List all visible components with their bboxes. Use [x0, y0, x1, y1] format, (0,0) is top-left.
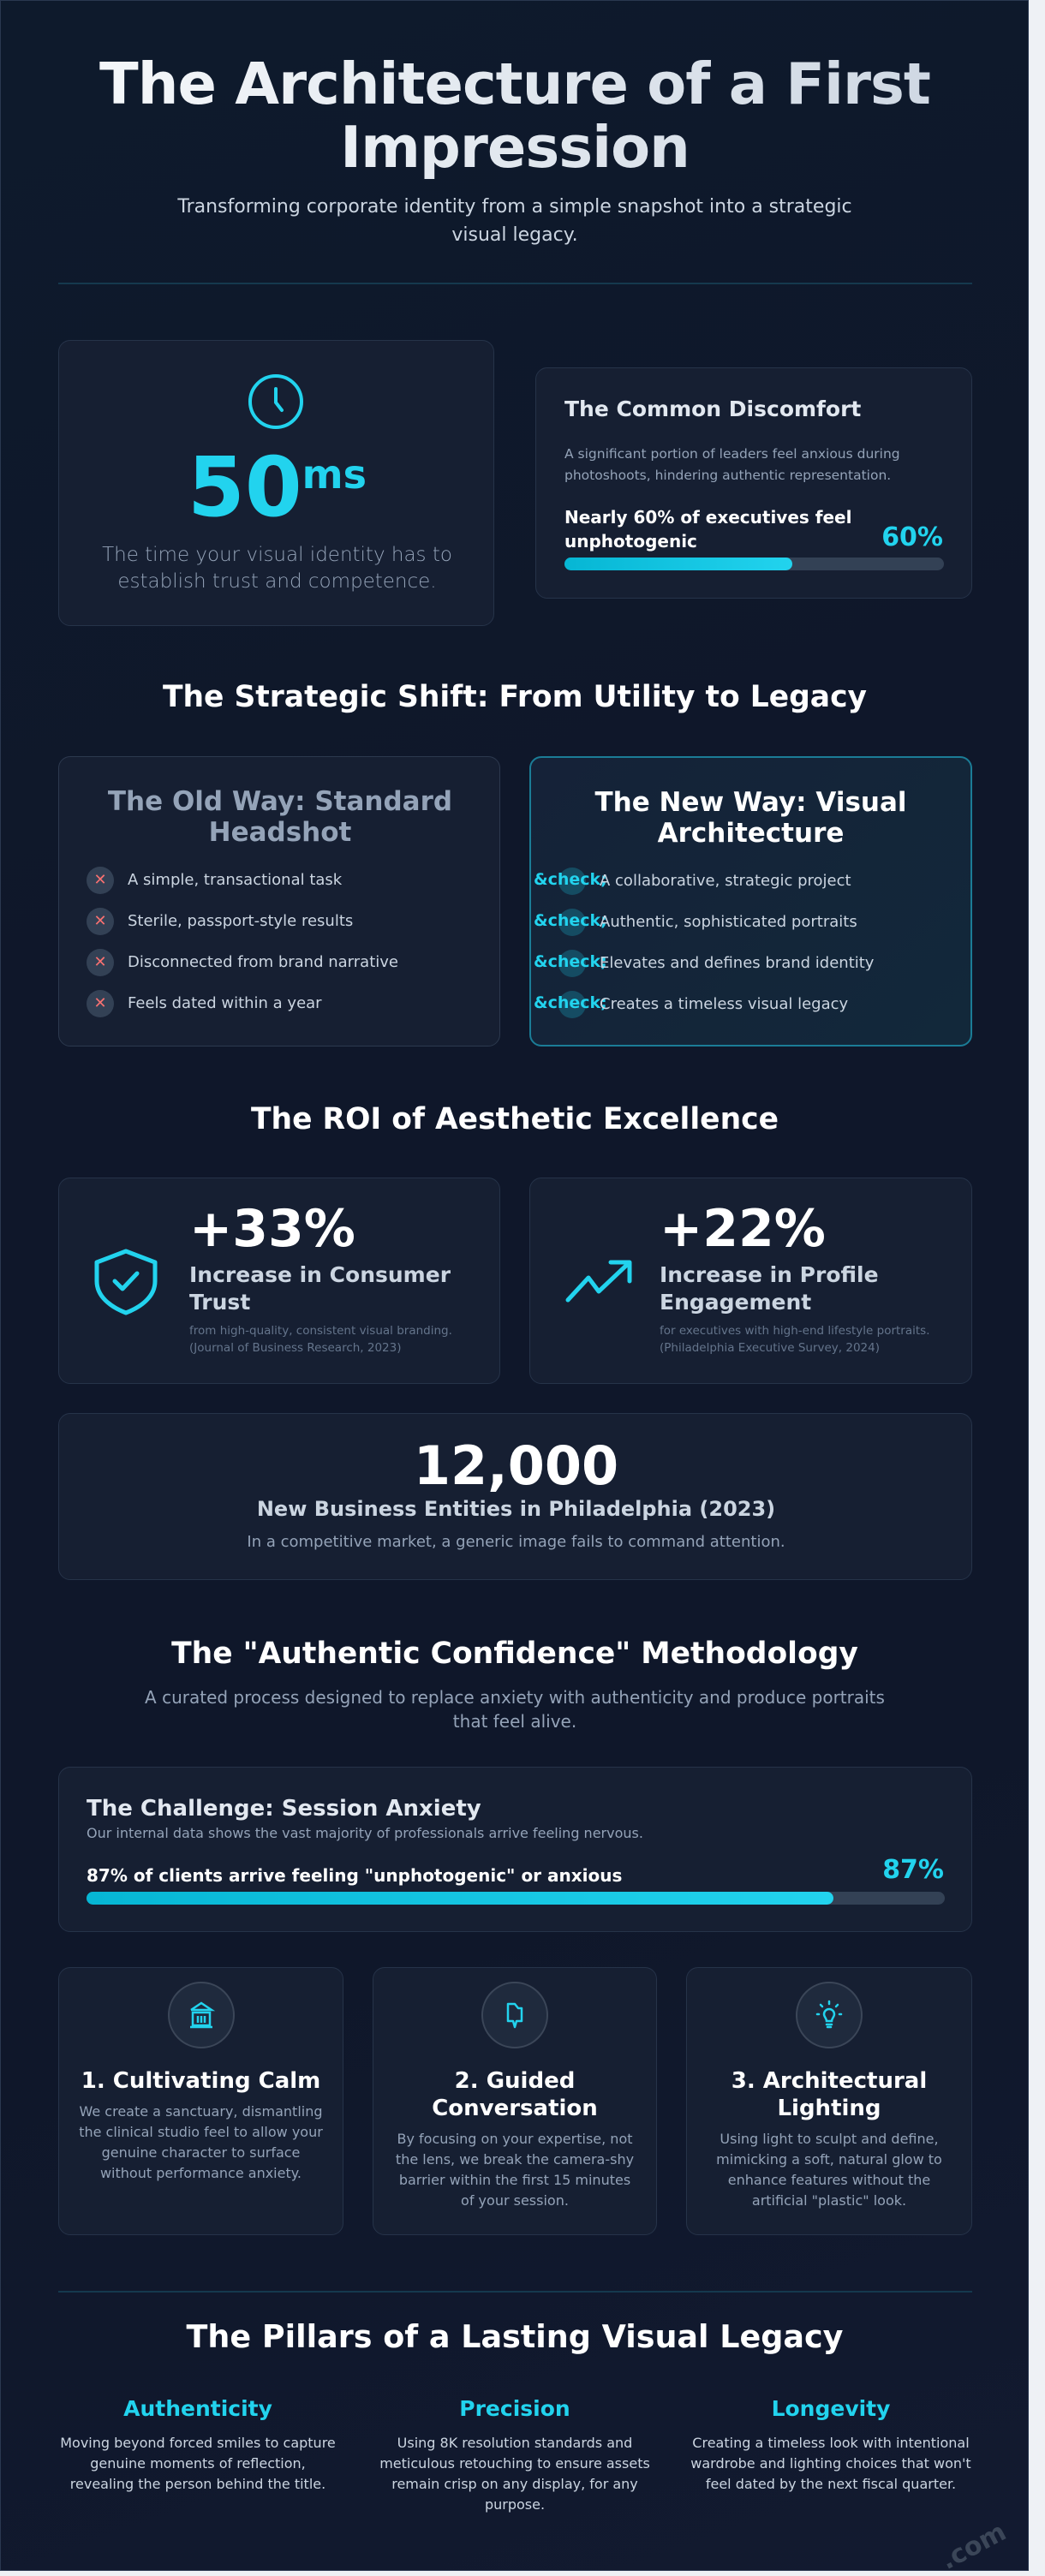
panel: step 3 — [686, 1967, 972, 2235]
panel: +22% — [529, 1178, 972, 1384]
bar: 60% — [564, 558, 944, 570]
panel: 12,000: New Business Entities in Philadelphia (2023) — [257, 1497, 775, 1521]
heading: ROI: The ROI of Aesthetic Excellence — [251, 1102, 779, 1136]
panel: old way: The Old Way: Standard — [108, 786, 452, 817]
panel: step 2 — [373, 1967, 657, 2235]
panel: new way — [529, 756, 972, 1046]
panel: old way: Sterile, passport-style results — [128, 912, 353, 930]
stat caption: The time your visual identity has to establish trust and competence. — [102, 544, 452, 593]
title — [1, 52, 1029, 179]
panel: +22%: Increase in Profile Engagement — [660, 1262, 879, 1315]
panel: 12,000: 12,000 — [414, 1434, 618, 1497]
panel: session anxiety: 87% of clients arrive feeling "unphotogenic" or anxious — [87, 1865, 622, 1886]
panel: new way: &check; — [534, 993, 607, 1012]
panel: new way: Creates a timeless visual legacy — [600, 995, 848, 1013]
pillar: authenticity: Authenticity — [123, 2396, 272, 2421]
heading: methodology: The "Authentic Confidence" Methodology — [171, 1637, 858, 1671]
panel: 50ms stat — [58, 340, 494, 626]
title: The Architecture of a First — [99, 51, 930, 117]
panel: common discomfort: The Common Discomfort — [564, 397, 861, 421]
pillar: precision — [379, 2396, 650, 2513]
icon: trend arrow — [565, 1261, 632, 1302]
panel: session anxiety: Our internal data shows the vast majority of professionals arrive feeling nervous. — [87, 1825, 643, 1841]
panel: new way: Architecture — [658, 818, 844, 849]
panel: session anxiety: The Challenge: Session Anxiety — [87, 1796, 481, 1822]
panel: step 2: Conversation — [432, 2096, 598, 2121]
panel: new way: Authentic, sophisticated portraits — [600, 913, 857, 931]
panel: old way — [58, 756, 500, 1046]
icon: clock — [248, 374, 303, 429]
panel: old way: ✕ — [93, 871, 107, 889]
pillar: longevity: Longevity — [772, 2396, 890, 2421]
panel: common discomfort — [535, 367, 972, 599]
methodology subtitle: A curated process designed to replace anxiety with authenticity and produce portraits that feel alive. — [145, 1687, 885, 1732]
panel: step 2: By focusing on your expertise, not the lens, we break the camera-shy barrier within the first 15 minutes of your session. — [396, 2131, 634, 2209]
heading: pillars: The Pillars of a Lasting Visual Legacy — [187, 2318, 843, 2355]
panel: +33%: Increase in Consumer Trust — [189, 1262, 451, 1315]
panel: +22%: for executives with high-end lifestyle portraits. (Philadelphia Executive Survey, 2024) — [660, 1324, 930, 1355]
panel: old way: ✕ — [93, 953, 107, 971]
panel: new way: Elevates and defines brand identity — [600, 954, 874, 972]
panel: 12,000 — [58, 1413, 972, 1580]
heading: strategic shift: The Strategic Shift: From Utility to Legacy — [163, 680, 867, 714]
panel: +33%: from high-quality, consistent visual branding. (Journal of Business Research, 2023) — [189, 1324, 452, 1355]
panel: step 3: Lighting — [777, 2096, 881, 2121]
panel: new way: A collaborative, strategic project — [600, 872, 851, 890]
panel: old way: Disconnected from brand narrative — [128, 953, 398, 971]
panel: new way: &check; — [534, 870, 607, 889]
panel: step 1 — [58, 1967, 343, 2235]
icon: speech bubble — [481, 1982, 548, 2048]
panel: step 2: 2. Guided — [455, 2068, 575, 2094]
panel: step 3: Using light to sculpt and define, mimicking a soft, natural glow to enhance features without the artificial "plastic" look. — [716, 2131, 942, 2209]
panel: +22%: +22% — [660, 1199, 826, 1259]
panel: step 3: 3. Architectural — [732, 2068, 927, 2094]
pillar: authenticity: Moving beyond forced smiles to capture genuine moments of reflection, revealing the person behind the title. — [60, 2435, 336, 2492]
subtitle: Transforming corporate identity from a simple snapshot into a strategic visual legacy. — [177, 196, 852, 246]
pillar: precision: Precision — [459, 2396, 570, 2421]
pillar: longevity: Creating a timeless look with intentional wardrobe and lighting choices that won't feel dated by the next fiscal quarter. — [690, 2435, 971, 2492]
panel: old way: Headshot — [209, 817, 351, 848]
panel: new way: The New Way: Visual — [594, 787, 907, 818]
icon: building — [168, 1982, 235, 2048]
panel: common discomfort: A significant portion of leaders feel anxious during photoshoots, hindering authentic representation. — [564, 446, 900, 483]
panel: old way: ✕ — [93, 994, 107, 1012]
panel: 12,000: In a competitive market, a generic image fails to command attention. — [247, 1533, 785, 1551]
panel: old way: Feels dated within a year — [128, 994, 322, 1012]
panel: common discomfort: 60% — [881, 522, 943, 552]
panel: new way: &check; — [534, 952, 607, 971]
bar: 87% — [87, 1892, 945, 1905]
panel: session anxiety — [58, 1767, 972, 1932]
watermark: .com — [936, 2517, 1012, 2576]
title: Impression — [340, 114, 690, 181]
panel: common discomfort: Nearly 60% of executives feel unphotogenic — [564, 507, 851, 552]
panel: step 1: 1. Cultivating Calm — [81, 2068, 320, 2094]
pillar: longevity — [690, 2396, 971, 2492]
pillar: authenticity — [60, 2396, 336, 2492]
panel: new way: &check; — [534, 911, 607, 930]
panel: step 1: We create a sanctuary, dismantling the clinical studio feel to allow your genuine character to surface without performance anxiety. — [79, 2103, 323, 2181]
panel: old way: A simple, transactional task — [128, 871, 342, 889]
pillar: precision: Using 8K resolution standards and meticulous retouching to ensure assets remain crisp on any display, for any purpose. — [379, 2435, 650, 2513]
panel: old way: ✕ — [93, 912, 107, 930]
panel: session anxiety: 87% — [882, 1855, 944, 1885]
icon: shield — [94, 1249, 158, 1315]
panel: +33%: +33% — [189, 1199, 355, 1259]
big stat: 50ms — [188, 439, 367, 535]
panel: +33% — [58, 1178, 500, 1384]
icon: light bulb — [796, 1982, 863, 2048]
